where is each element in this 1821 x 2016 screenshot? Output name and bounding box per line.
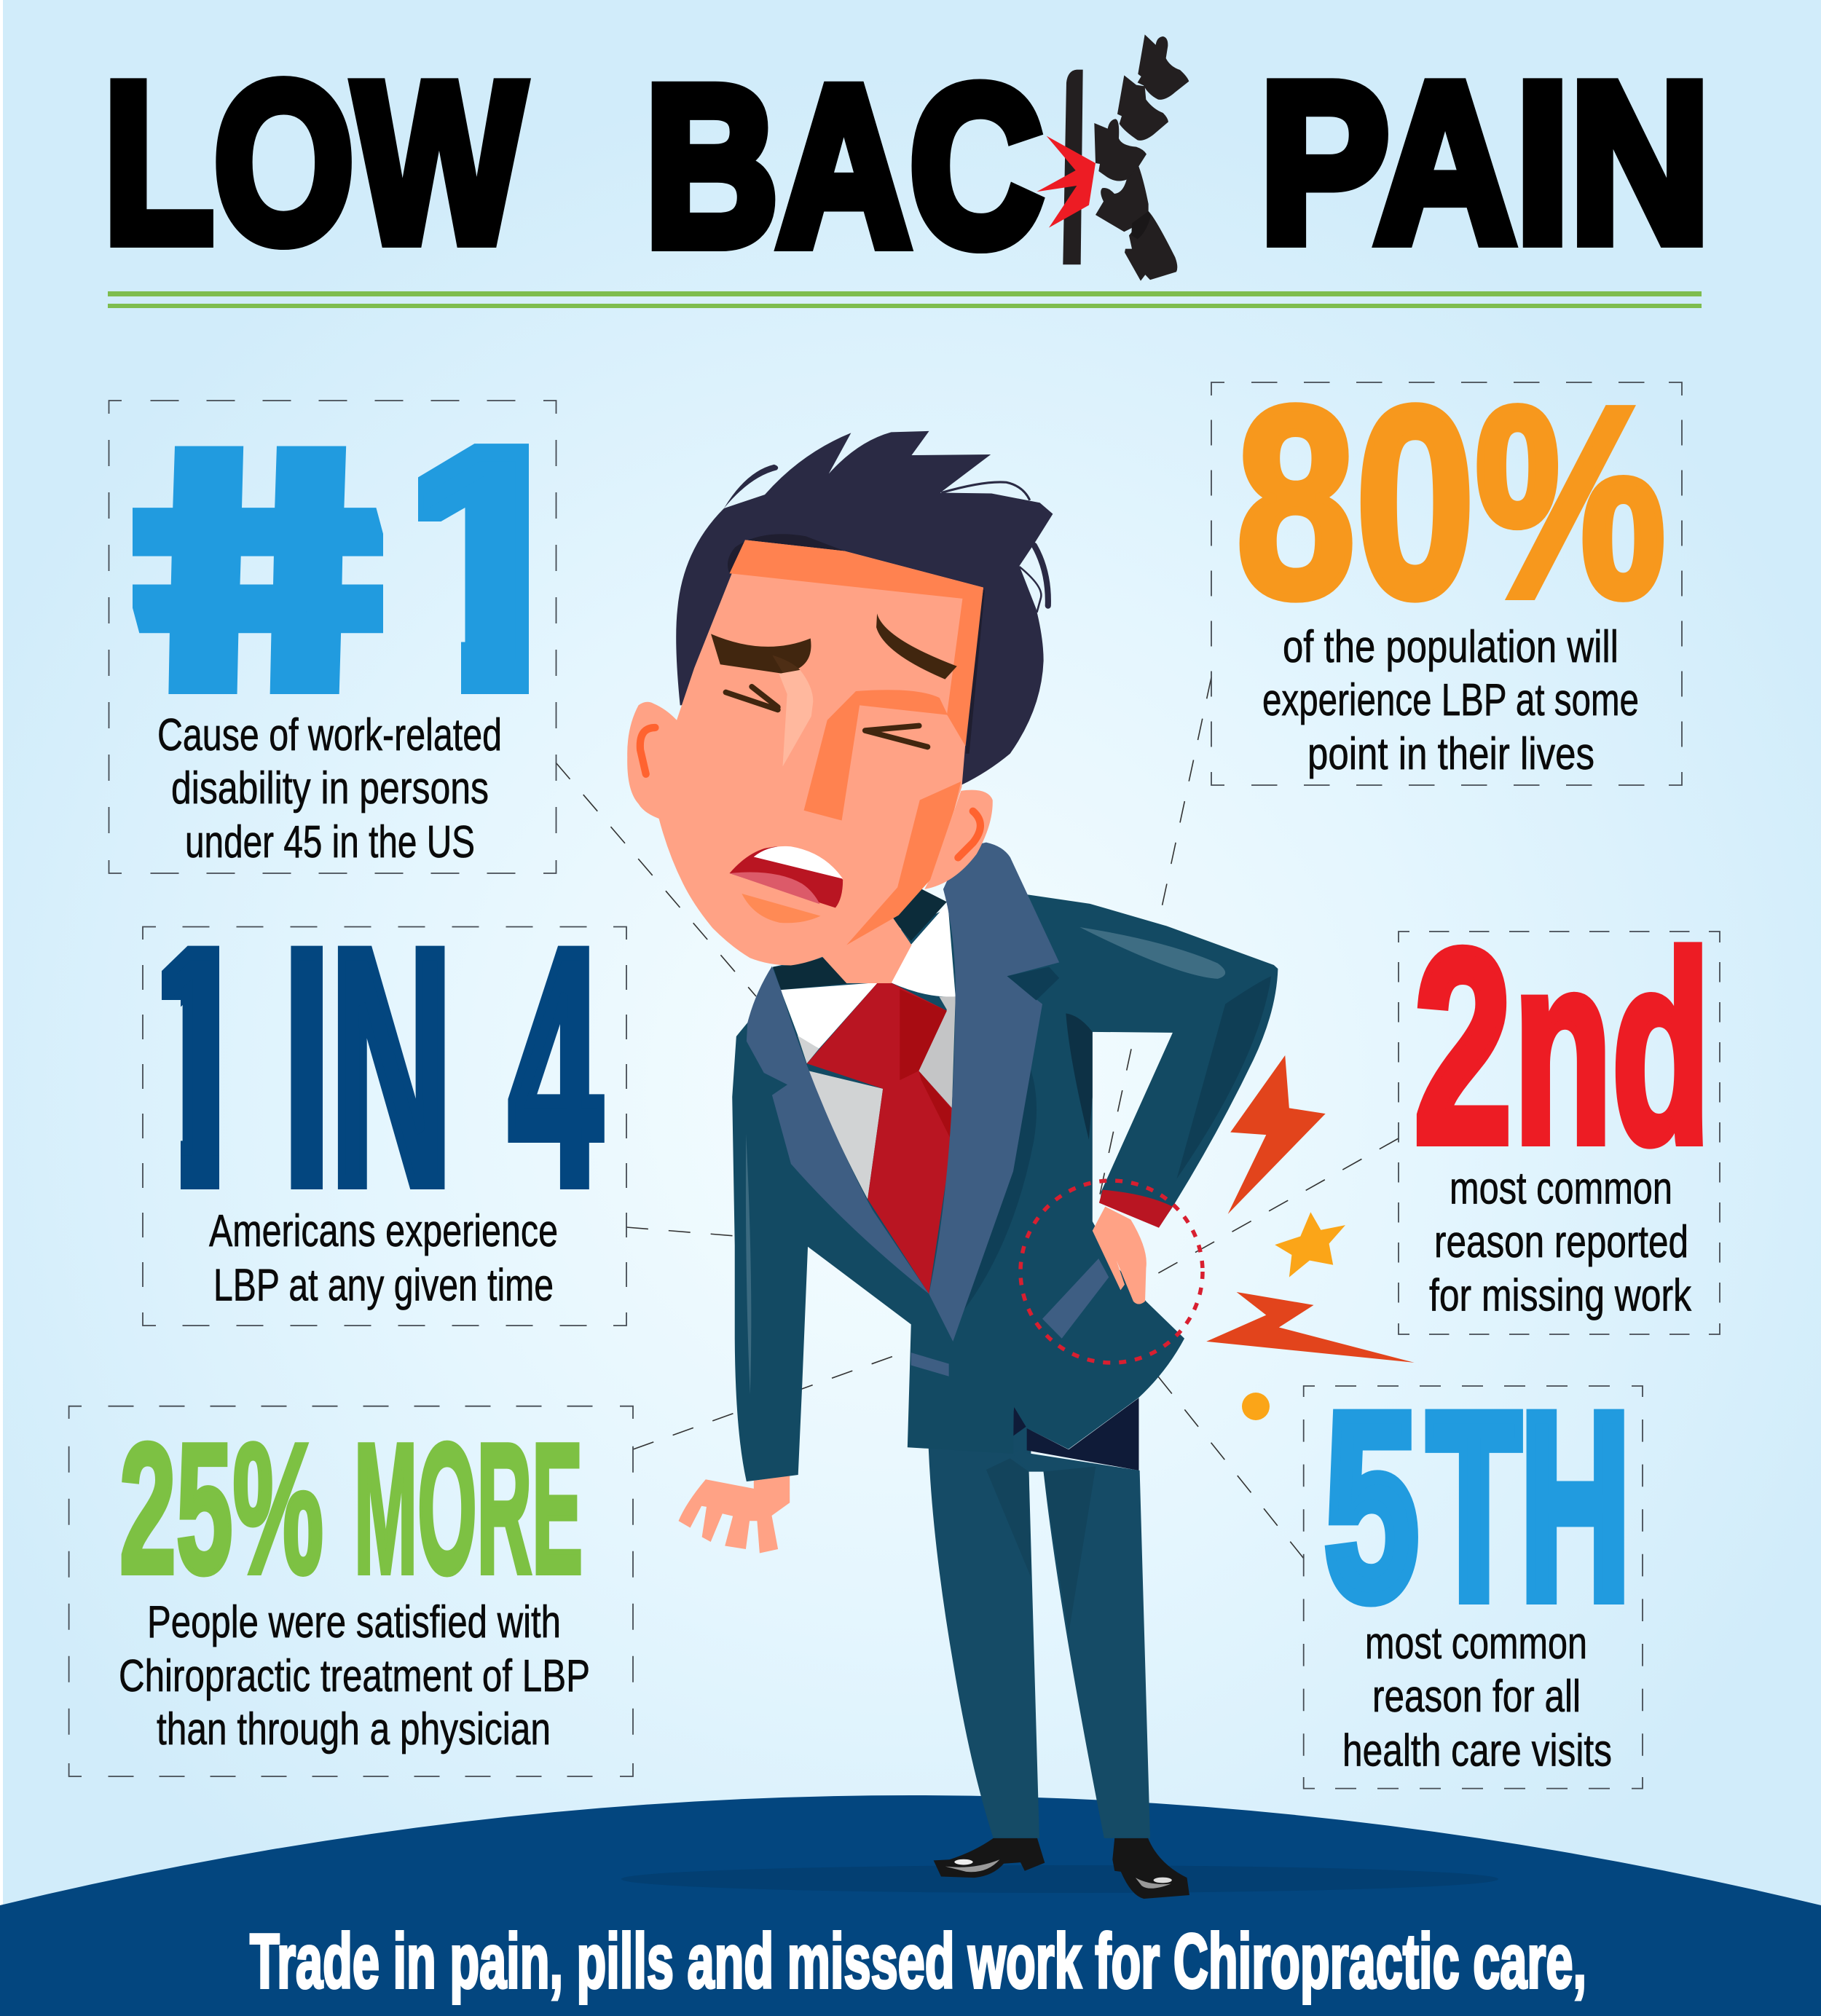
caption xyxy=(119,1597,590,1755)
caption: Cause of work-related xyxy=(157,710,502,760)
title: LOW BACK PAIN: LOW xyxy=(103,36,526,290)
connector lines from panels to the figure xyxy=(556,677,1399,1559)
stat: 5TH: TH xyxy=(1428,1359,1630,1653)
caption xyxy=(1342,1618,1612,1776)
caption: than through a physician xyxy=(157,1704,551,1755)
legs and left hand xyxy=(679,1398,1189,1899)
caption xyxy=(157,710,502,867)
panel: 5th reason xyxy=(1304,1359,1643,1789)
caption: health care visits xyxy=(1342,1726,1612,1776)
stat: 1 IN 4 xyxy=(162,945,605,1189)
dashed frame xyxy=(1399,932,1720,1334)
caption: disability in persons xyxy=(171,763,489,814)
dashed frame xyxy=(109,401,556,873)
caption xyxy=(1262,622,1639,779)
stat: 5TH: 5 xyxy=(1325,1359,1418,1653)
title: LOW BACK PAIN: BAC xyxy=(645,39,1042,292)
suit jacket, shirt and tie xyxy=(732,843,1278,1481)
caption: Americans experience xyxy=(209,1206,558,1256)
panel: number one cause xyxy=(108,400,556,874)
panel: 1 in 4 xyxy=(142,926,627,1326)
caption: under 45 in the US xyxy=(185,817,475,867)
caption: reason for all xyxy=(1372,1672,1581,1722)
caption: most common xyxy=(1450,1164,1672,1213)
dashed frame xyxy=(69,1406,633,1776)
panel: 80 percent xyxy=(1211,350,1682,785)
caption xyxy=(1429,1164,1692,1321)
stat: 2nd xyxy=(1414,893,1710,1200)
dashed frame xyxy=(1304,1386,1643,1789)
title: LOW BACK PAIN xyxy=(103,36,1710,292)
caption: experience LBP at some xyxy=(1262,675,1639,725)
stat: 5TH xyxy=(1325,1359,1630,1653)
icon: broken spine forming the letter K xyxy=(1037,34,1189,281)
ground shadow xyxy=(621,1865,1498,1893)
icon: orange dot xyxy=(1242,1393,1270,1420)
divider: double green rule xyxy=(108,291,1702,308)
stat: 25% MORE: 25% xyxy=(119,1405,323,1612)
caption: People were satisfied with xyxy=(147,1597,561,1647)
dashed frame xyxy=(1211,382,1682,785)
panel: 25 percent more: MORE xyxy=(354,1405,583,1612)
panel: 25 percent more xyxy=(69,1405,633,1776)
caption: point in their lives xyxy=(1307,729,1594,779)
stat: 1 IN 4: 1 xyxy=(135,881,259,1253)
caption: of the population will xyxy=(1283,622,1619,672)
caption xyxy=(209,1206,558,1311)
stat: 80%: 80% xyxy=(1236,350,1666,653)
head with pained expression xyxy=(627,431,1053,983)
caption: for missing work xyxy=(1429,1270,1692,1321)
dashed frame xyxy=(143,926,626,1326)
stat: 1 IN 4: IN xyxy=(283,881,452,1253)
caption: most common xyxy=(1365,1618,1587,1669)
stat: 1 IN 4: 4 xyxy=(509,881,602,1253)
stat: #1: # xyxy=(82,385,432,752)
figure: man holding his lower back xyxy=(627,431,1278,1899)
stat: 2nd: 2 xyxy=(1414,893,1512,1200)
title: LOW BACK PAIN: PAIN xyxy=(1259,36,1710,290)
stat: #1: 1 xyxy=(389,379,593,757)
pain accents: lightning bolts, star and dot xyxy=(1206,1055,1415,1363)
ground: navy curved floor xyxy=(0,1795,1821,2016)
caption: reason reported xyxy=(1434,1217,1688,1267)
caption: Chiropractic treatment of LBP xyxy=(119,1651,590,1701)
caption: LBP at any given time xyxy=(213,1260,554,1311)
dashed red circle around the painful area xyxy=(1020,1181,1203,1363)
panel: 2nd reason xyxy=(1399,893,1720,1334)
stat: #1 xyxy=(82,379,593,757)
